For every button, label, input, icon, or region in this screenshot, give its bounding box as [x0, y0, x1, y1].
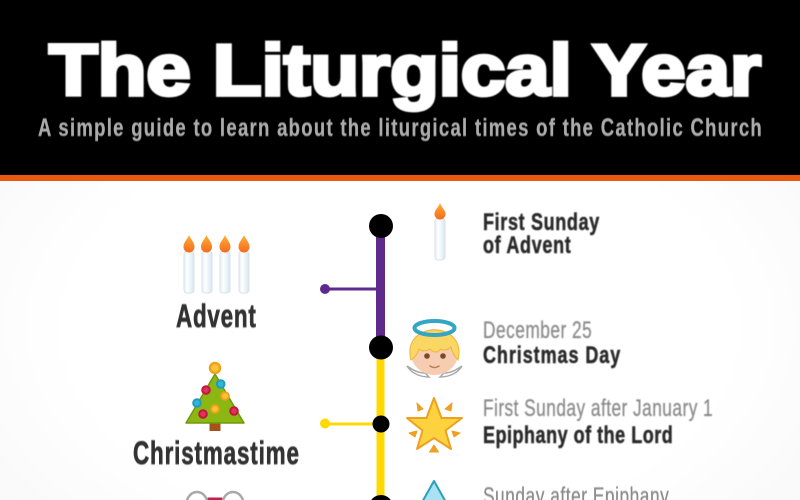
icon: four advent candles	[184, 235, 250, 293]
text: First Sunday of Advent: of Advent	[483, 233, 571, 259]
text: First Sunday of Advent	[483, 210, 599, 259]
timeline	[320, 214, 393, 500]
text: First Sunday of Advent: First Sunday	[483, 210, 599, 236]
label: Advent: Advent	[176, 298, 256, 334]
text: Epiphany of the Lord: Epiphany of the Lord	[483, 423, 673, 449]
header band	[0, 0, 800, 181]
text: Christmas Day: Christmas Day	[483, 343, 620, 369]
title: The Liturgical Year	[49, 31, 761, 111]
icon: water drop	[421, 481, 447, 500]
label: Christmastime: Christmastime	[133, 435, 299, 471]
text: Epiphany of the Lord: First Sunday after January 1	[483, 395, 713, 422]
icon: star	[407, 398, 462, 452]
icon: single candle	[434, 203, 446, 260]
text: Christmas Day: December 25	[483, 317, 592, 344]
text: Epiphany of the Lord	[483, 395, 713, 449]
icon: partial figure at bottom edge	[186, 492, 244, 500]
icon: christmas tree	[186, 363, 244, 431]
icon: angel	[407, 321, 462, 377]
subtitle: A simple guide to learn about the liturgical times of the Catholic Church	[38, 113, 762, 142]
text: Christmas Day	[483, 317, 620, 369]
